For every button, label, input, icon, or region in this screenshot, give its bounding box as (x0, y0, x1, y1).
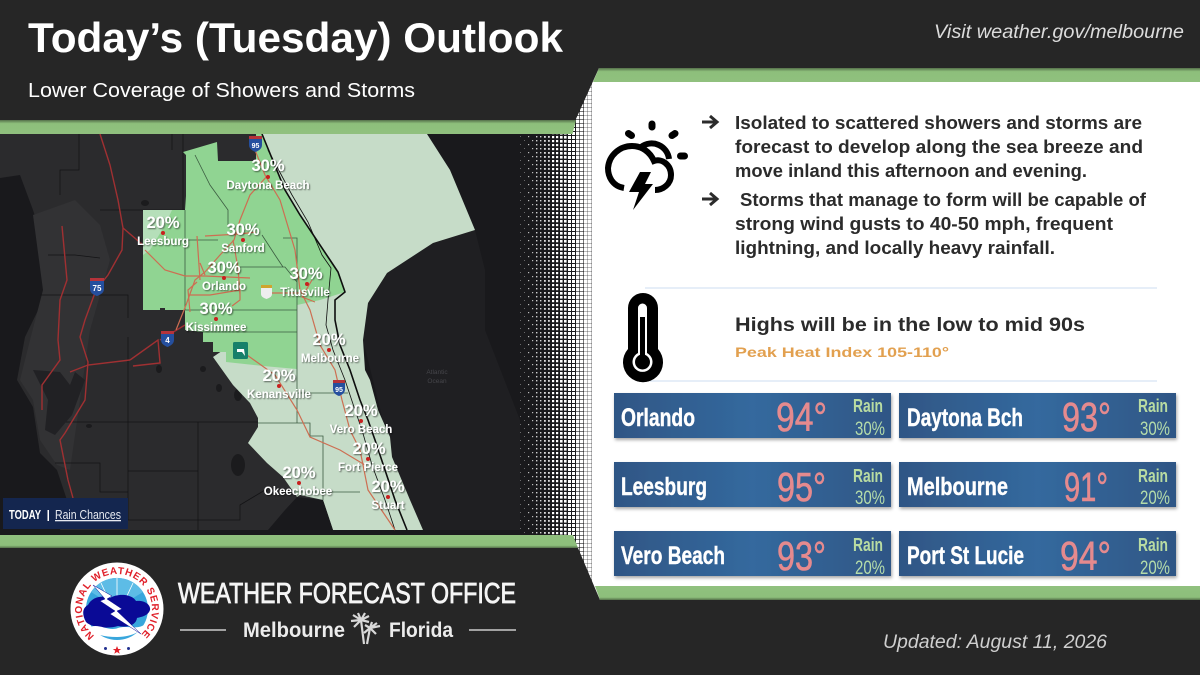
icon: thunderstorm with sun (608, 124, 684, 210)
county lines on forecast area (185, 155, 360, 500)
footer band (0, 548, 1200, 675)
map legend tag: TODAY (9, 507, 41, 522)
inland lakes (86, 200, 245, 476)
city card: Orlando (614, 393, 891, 440)
map city labels: 30% (289, 265, 323, 283)
map city labels: Leesburg (137, 236, 189, 248)
city card: Port St Lucie: 20% (1140, 558, 1170, 579)
rain chance zone 30 percent (143, 134, 345, 369)
map city labels: 20% (344, 402, 378, 420)
logo: National Weather Service: NATIONAL WEATHER SERVICE (75, 567, 159, 640)
office name: WEATHER FORECAST OFFICE (178, 578, 516, 610)
atlantic ocean label: Ocean (427, 378, 447, 385)
rain chance zone 20 percent (213, 134, 475, 530)
city card: Vero Beach: Vero Beach (621, 542, 725, 570)
map city labels (137, 157, 405, 512)
map legend tag: Rain Chances (55, 507, 121, 522)
office location: Florida (389, 619, 453, 642)
tampa bay (33, 370, 85, 435)
map city labels: 30% (207, 259, 241, 277)
city card: Port St Lucie: Rain (1138, 535, 1168, 555)
map city labels: Okeechobee (264, 486, 332, 498)
map city labels: Daytona Beach (226, 180, 310, 192)
subtitle: Lower Coverage of Showers and Storms (28, 80, 415, 102)
city card: Vero Beach: Rain (853, 535, 883, 555)
header band (0, 0, 1200, 120)
map city labels: Vero Beach (330, 424, 392, 436)
updated date: Updated: August 11, 2026 (883, 632, 1107, 653)
atlantic ocean label: Atlantic (426, 369, 448, 376)
map city labels: Stuart (371, 500, 405, 512)
website link: Visit weather.gov/melbourne (934, 22, 1184, 43)
city card: Melbourne: 20% (1140, 488, 1170, 509)
map city labels: 20% (262, 367, 296, 385)
city card: Daytona Bch (899, 393, 1176, 440)
city card: Vero Beach (614, 531, 891, 579)
icon: palm trees (351, 613, 380, 644)
city card: Orlando: Orlando (621, 404, 695, 432)
highway shields: 95 (252, 143, 259, 150)
arrow bullet one (702, 116, 717, 128)
lake okeechobee (268, 497, 333, 530)
map city labels: 30% (251, 157, 285, 175)
city card: Daytona Bch: 93° (1062, 394, 1111, 440)
city card: Port St Lucie: 94° (1060, 533, 1111, 579)
highs heading: Highs will be in the low to mid 90s (735, 315, 1085, 336)
forecast text: second bullet: lightning, and locally heavy rainfall. (735, 238, 1055, 258)
county lines on land (40, 134, 265, 530)
map city labels: 30% (226, 221, 260, 239)
map city labels: 20% (146, 214, 180, 232)
city card: Port St Lucie: Port St Lucie (907, 542, 1024, 570)
city card: Port St Lucie (899, 531, 1176, 579)
office location: Melbourne (243, 619, 345, 642)
map city labels: 20% (371, 478, 405, 496)
highway shields: 4 (165, 336, 170, 345)
map city labels: Fort Pierce (338, 462, 398, 474)
map city labels: 30% (199, 300, 233, 318)
title: Today’s (Tuesday) Outlook (28, 14, 564, 61)
forecast text: first bullet: forecast to develop along the sea breeze and (735, 137, 1143, 157)
green bars (0, 68, 1200, 600)
map city labels: Melbourne (301, 353, 359, 365)
city card: Vero Beach: 93° (777, 533, 826, 579)
map city labels: Kissimmee (186, 322, 246, 334)
gulf stream tint (363, 230, 520, 530)
city card: Leesburg (614, 462, 891, 510)
map city labels: Titusville (280, 287, 330, 299)
atlantic ocean label (426, 369, 448, 385)
forecast text: second bullet: Storms that manage to form will be capable of (740, 190, 1147, 210)
office location (180, 619, 516, 642)
city card: Daytona Bch: Rain (1138, 396, 1168, 416)
forecast text: first bullet: Isolated to scattered showers and storms are (735, 113, 1142, 133)
city card: Melbourne: Melbourne (907, 473, 1008, 501)
city card: Orlando: 30% (855, 419, 885, 440)
map city labels: 20% (312, 331, 346, 349)
city card: Leesburg: 30% (855, 488, 885, 509)
map city labels: Orlando (202, 281, 246, 293)
map city labels: 20% (282, 464, 316, 482)
highway shields (90, 136, 345, 396)
forecast text: first bullet: move inland this afternoon and evening. (735, 161, 1087, 181)
map city labels: 20% (352, 440, 386, 458)
city card: Vero Beach: 20% (855, 558, 885, 579)
highway shields: 95 (335, 387, 343, 394)
red highways on land (42, 134, 185, 498)
forecast text: first bullet (735, 113, 1143, 181)
land west of the forecast area (0, 134, 423, 530)
city card: Leesburg: 95° (777, 464, 826, 510)
highways in forecast area (145, 150, 395, 530)
pale patch near Leesburg (143, 210, 172, 255)
map legend tag (3, 498, 128, 529)
coastline (262, 134, 407, 530)
city card: Orlando: Rain (853, 396, 883, 416)
heat index: Peak Heat Index 105-110° (735, 344, 949, 360)
arrow bullet two (702, 193, 717, 205)
city card: Daytona Bch: Daytona Bch (907, 404, 1023, 432)
city dots (161, 175, 390, 499)
city card: Melbourne: Rain (1138, 466, 1168, 486)
city card: Leesburg: Leesburg (621, 473, 707, 501)
city card: Daytona Bch: 30% (1140, 419, 1170, 440)
city card: Melbourne: 91° (1064, 464, 1108, 510)
peninsula lighter shade (20, 200, 110, 470)
city card: Orlando: 94° (776, 394, 827, 440)
map (0, 60, 600, 550)
city card: Melbourne (899, 462, 1176, 510)
forecast text: second bullet (735, 190, 1147, 258)
map city labels: Kenansville (247, 389, 311, 401)
icon: thermometer (623, 293, 663, 382)
halftone fade (520, 60, 1200, 600)
city card: Leesburg: Rain (853, 466, 883, 486)
forecast text: second bullet: strong wind gusts to 40-50 mph, frequent (735, 214, 1113, 234)
highway shields: 75 (93, 284, 102, 293)
map city labels: Sanford (221, 243, 265, 255)
